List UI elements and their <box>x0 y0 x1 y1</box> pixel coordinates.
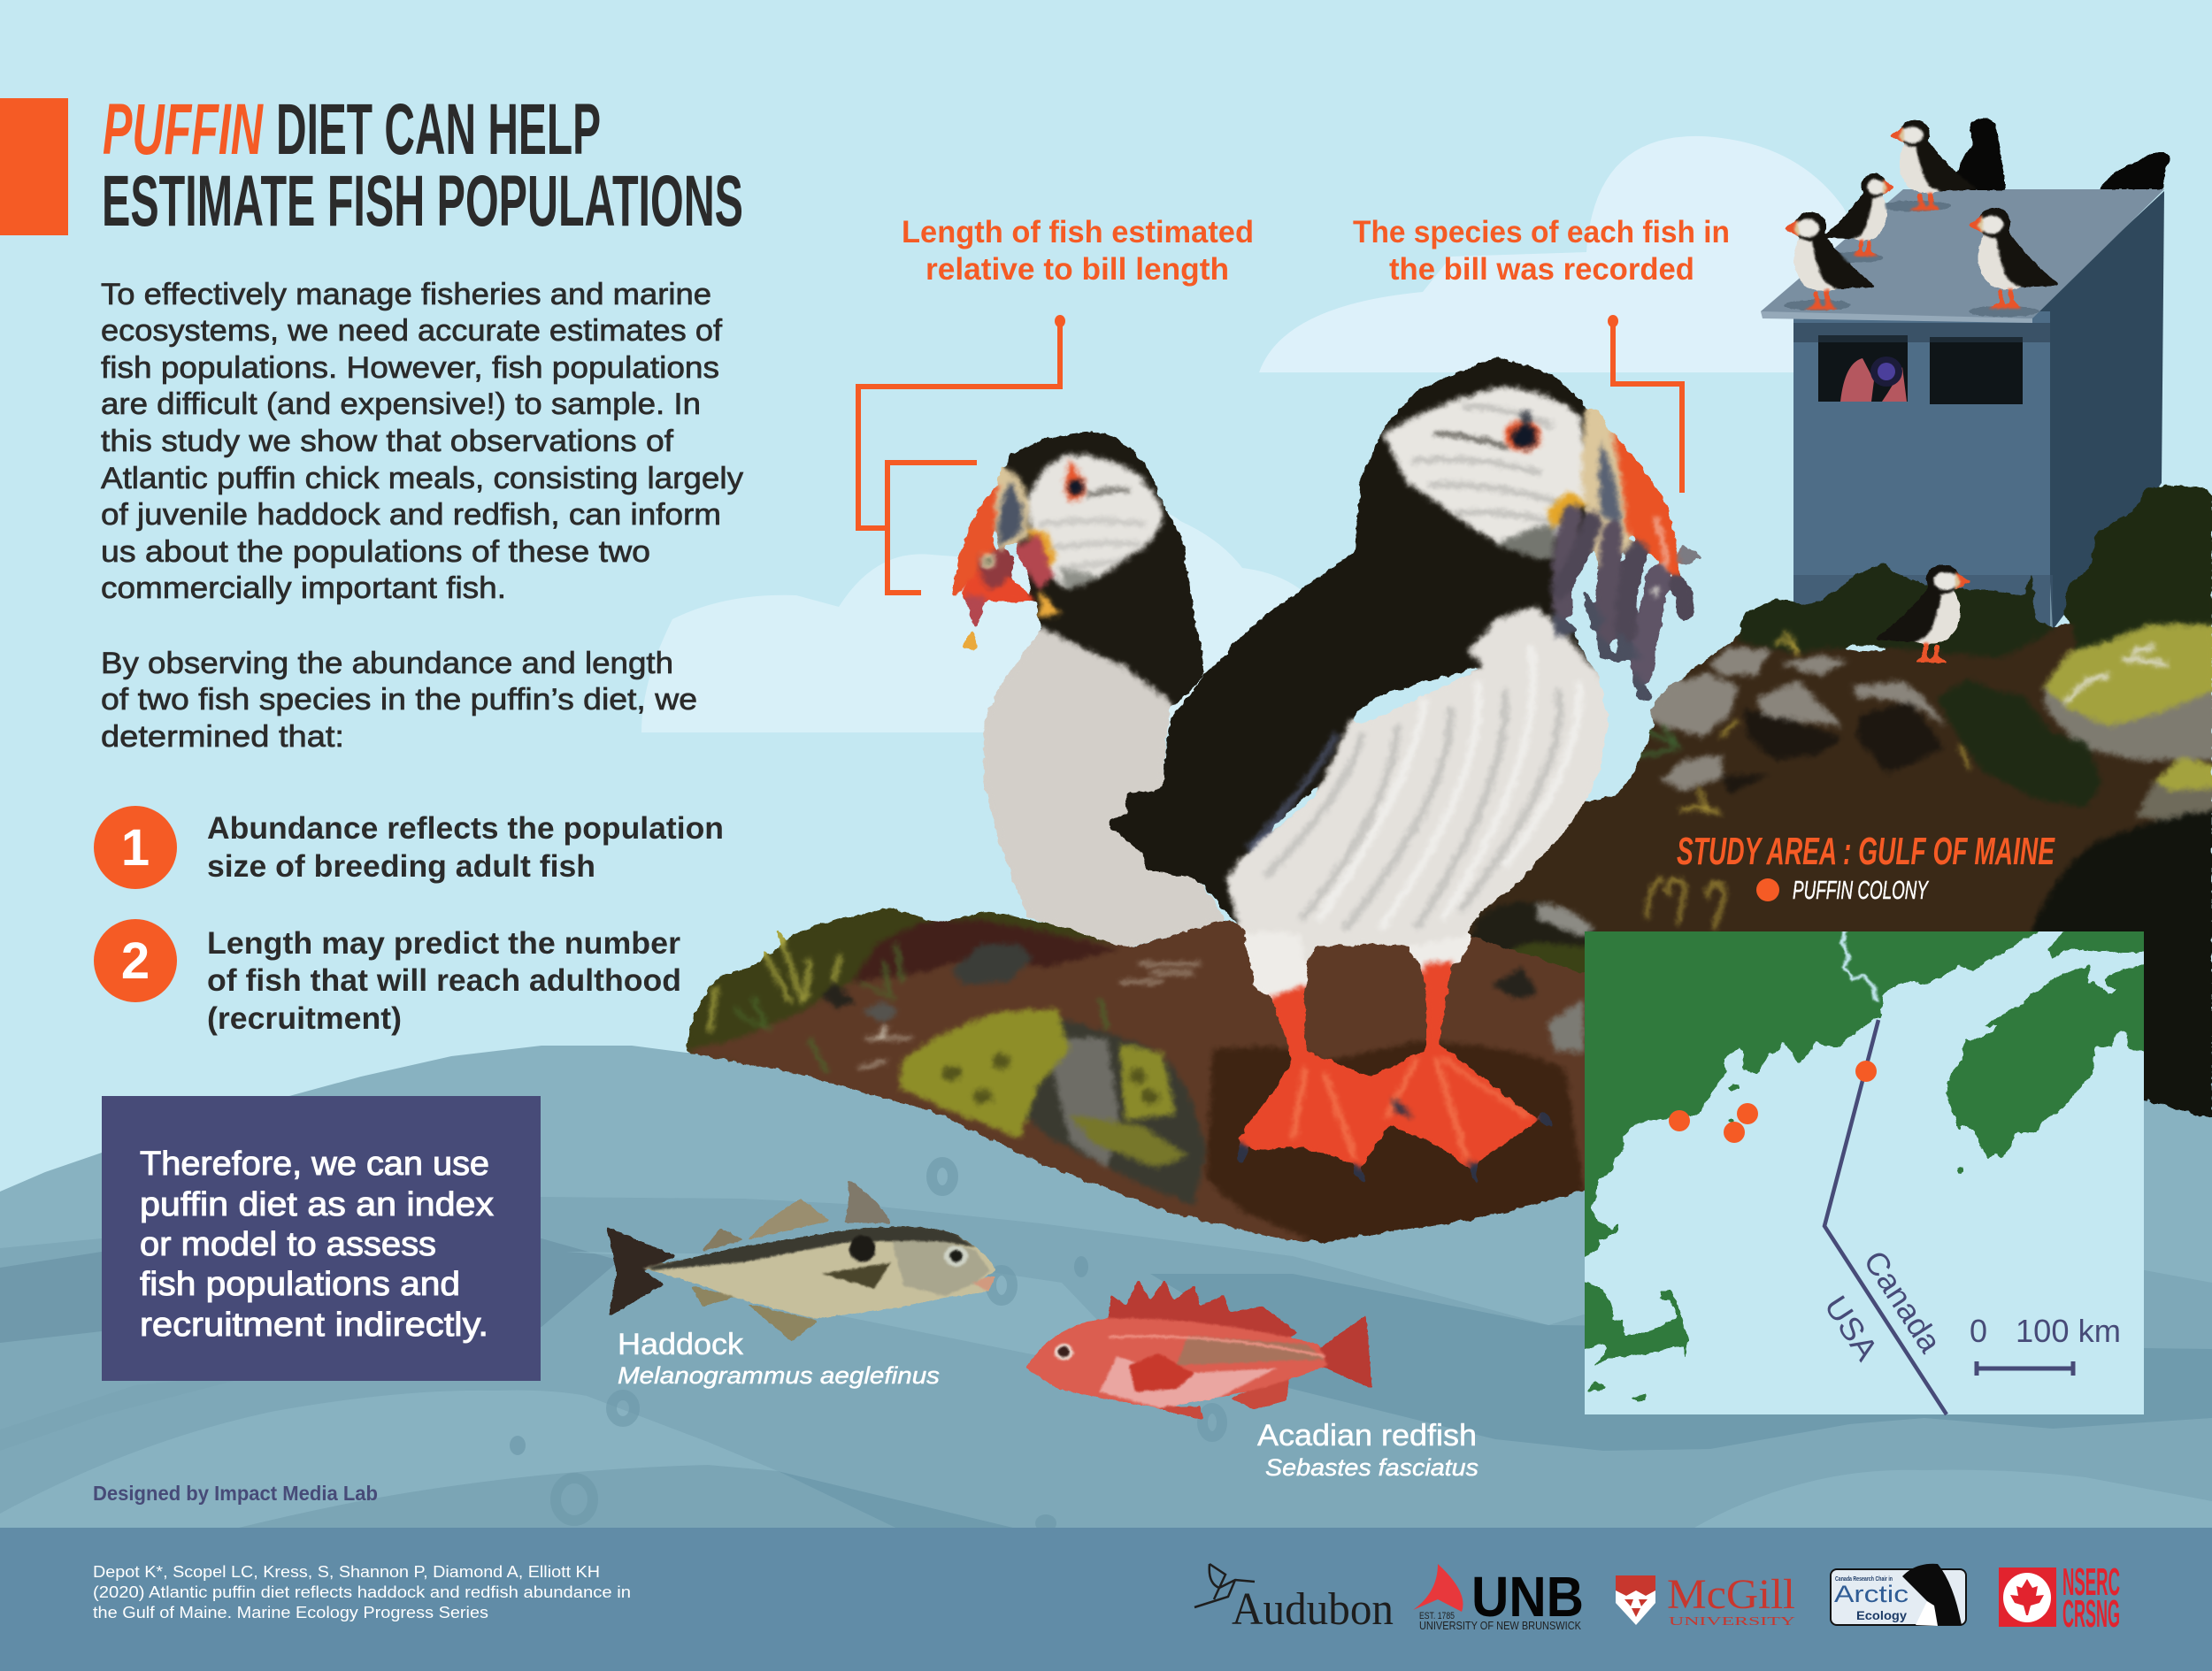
rear puffin black plumage <box>1004 432 1205 705</box>
dark foreground under belly <box>1464 901 1593 1008</box>
citation <box>93 1563 631 1621</box>
silhouette puffin at right <box>2099 152 2170 189</box>
text: NSERC <box>2062 1560 2120 1604</box>
logo: NSERC <box>1999 1560 2120 1636</box>
intro paragraph: Atlantic puffin chick meals, consisting largely <box>101 462 743 495</box>
study area label <box>1677 830 2055 905</box>
fish: Acadian redfish <box>1025 1280 1372 1420</box>
lichen rock <box>2044 625 2212 822</box>
moss mound <box>685 908 1125 1062</box>
dark patch under feet <box>1206 1041 1584 1243</box>
right island: soil, shrubs and rocks <box>1451 483 2212 1194</box>
big puffin <box>1106 356 1705 1194</box>
puffin colony legend dot <box>1756 878 1779 901</box>
border line <box>1824 1020 1947 1414</box>
intro paragraph <box>101 278 743 605</box>
left shrubs <box>1739 565 2055 658</box>
black shrub lower right <box>2032 810 2212 1119</box>
logo: Arctic Ecology: Ecology <box>1856 1608 1907 1622</box>
citation: Depot K*, Scopel LC, Kress, S, Shannon P, Diamond A, Elliott KH <box>93 1563 600 1581</box>
hut roof <box>1761 189 2164 318</box>
text: CRSNG <box>2062 1592 2120 1636</box>
label: Canada: Canada <box>1856 1244 1949 1360</box>
second paragraph: By observing the abundance and length <box>101 647 673 680</box>
puffin colony legend text: PUFFIN COLONY <box>1793 877 1930 905</box>
yellow sprouts <box>710 929 840 1032</box>
title <box>102 89 743 241</box>
footer band <box>0 1528 2212 1671</box>
label: redfish: Sebastes fasciatus <box>1265 1454 1479 1481</box>
logo: Arctic Ecology <box>1831 1564 1966 1626</box>
hut side wall <box>2035 191 2164 630</box>
finding 2: 2 <box>121 932 150 990</box>
logo: McGill: UNIVERSITY <box>1669 1615 1795 1629</box>
hut: observation blind <box>1761 189 2164 630</box>
yellow sprouts <box>1647 632 1970 929</box>
callout text: length: Length of fish estimated <box>902 215 1254 249</box>
citation: (2020) Atlantic puffin diet reflects haddock and redfish abundance in <box>93 1583 631 1601</box>
logo: UNB: UNB <box>1471 1565 1584 1629</box>
island features traced <box>1640 483 2212 929</box>
cloud: upper right <box>1259 136 1885 372</box>
left island <box>685 908 1665 1243</box>
scale label: 0 <box>1970 1313 1987 1349</box>
citation: the Gulf of Maine. Marine Ecology Progress Series <box>93 1604 488 1621</box>
big puffin bill and fish <box>1547 407 1705 701</box>
grey rocks <box>1648 647 1947 793</box>
big puffin belly <box>1226 606 1608 967</box>
puffin D <box>1823 173 1894 257</box>
logo: Arctic Ecology: Arctic <box>1834 1581 1909 1607</box>
fern <box>1640 726 1680 757</box>
right bush <box>2064 483 2212 664</box>
ground puffin <box>1874 564 1971 663</box>
finding 2: (recruitment) <box>207 1001 402 1036</box>
finding 1 <box>94 806 724 889</box>
conclusion box <box>102 1096 541 1381</box>
big puffin black plumage <box>1106 356 1600 926</box>
photographer hands and camera <box>1840 356 1907 402</box>
white leg feathers <box>1243 931 1309 1001</box>
scale label <box>1970 1313 2121 1349</box>
title: ESTIMATE FISH POPULATIONS <box>102 161 743 241</box>
rear puffin belly <box>984 628 1226 948</box>
conclusion box: or model to assess <box>140 1226 436 1263</box>
big puffin face <box>1383 387 1586 558</box>
intro paragraph: To effectively manage fisheries and marine <box>101 278 711 311</box>
callout text: species: The species of each fish in <box>1353 215 1730 249</box>
finding 2 <box>94 919 681 1036</box>
belly feather strokes <box>1265 646 1579 929</box>
callout text: species <box>1353 215 1730 287</box>
grass blades <box>734 944 1107 1073</box>
label: haddock: Melanogrammus aeglefinus <box>618 1362 940 1389</box>
rear puffin <box>951 432 1226 948</box>
hut windows <box>1818 335 2023 404</box>
map water <box>1585 931 2144 1414</box>
small dark rocks <box>821 944 1584 1053</box>
claws <box>1236 1097 1560 1194</box>
finding 1: size of breeding adult fish <box>207 849 595 884</box>
logo: UNB: UNIVERSITY OF NEW BRUNSWICK <box>1419 1619 1581 1632</box>
soil <box>685 920 1665 1241</box>
title: DIET CAN HELP <box>276 89 601 170</box>
pale markings <box>858 964 1200 1068</box>
designer credit: Designed by Impact Media Lab <box>93 1482 378 1505</box>
side accent bar <box>0 98 68 235</box>
second paragraph: of two fish species in the puffin’s diet, we <box>101 683 697 717</box>
map: Gulf of Maine <box>1574 925 2158 1414</box>
label: haddock: Haddock <box>618 1328 744 1361</box>
callout text: length: relative to bill length <box>926 252 1229 287</box>
callout text: length <box>902 215 1254 287</box>
map land <box>1585 931 2144 1401</box>
right foot <box>1368 962 1539 1168</box>
hut front wall <box>1793 311 2050 630</box>
puffin E <box>1784 211 1876 310</box>
label: USA: USA <box>1817 1289 1886 1367</box>
finding 2: Length may predict the number <box>207 926 680 961</box>
big puffin legs and feet <box>1236 931 1560 1194</box>
label: redfish <box>1257 1419 1479 1481</box>
logo: UNB <box>1413 1564 1584 1632</box>
intro paragraph: fish populations. However, fish populations <box>101 351 719 385</box>
finding 2: of fish that will reach adulthood <box>207 963 681 998</box>
logo: McGill <box>1616 1571 1795 1629</box>
puffin A <box>1890 120 1977 211</box>
lichen rock <box>899 1008 1206 1206</box>
intro paragraph: ecosystems, we need accurate estimates of <box>101 314 723 348</box>
left foot <box>1237 985 1399 1168</box>
intro paragraph: are difficult (and expensive!) to sample. In <box>101 387 701 421</box>
rear puffin head details <box>951 454 1164 650</box>
intro paragraph: of juvenile haddock and redfish, can inform <box>101 498 721 532</box>
scale label: 100 km <box>2016 1313 2121 1349</box>
puffin F <box>1968 208 2060 309</box>
second paragraph <box>101 647 697 754</box>
colony dots <box>1669 1061 1877 1143</box>
soil <box>1451 596 2212 1194</box>
logo: Audubon: Audubon <box>1232 1584 1394 1635</box>
fish: haddock <box>607 1179 995 1342</box>
callout text: species: the bill was recorded <box>1389 252 1694 287</box>
label: haddock <box>618 1328 940 1389</box>
cloud: lower left <box>641 510 1327 732</box>
intro paragraph: this study we show that observations of <box>101 425 674 458</box>
conclusion box: fish populations and <box>140 1266 460 1303</box>
roof puffins <box>1784 118 2170 317</box>
callout leader: species <box>1608 315 1682 493</box>
logo: McGill: McGill <box>1667 1571 1795 1618</box>
label: redfish: Acadian redfish <box>1257 1419 1477 1453</box>
ocean waves <box>0 1046 2212 1671</box>
mid bush <box>1938 678 2102 808</box>
second paragraph: determined that: <box>101 720 344 754</box>
logo: UNB: EST. 1785 <box>1419 1611 1455 1621</box>
logo: Arctic Ecology: Canada Research Chair in <box>1835 1576 1893 1583</box>
finding 1: 1 <box>121 819 150 877</box>
conclusion box: Therefore, we can use <box>140 1146 489 1183</box>
conclusion box: recruitment indirectly. <box>140 1307 488 1344</box>
title: PUFFIN <box>103 89 264 170</box>
intro paragraph: us about the populations of these two <box>101 535 650 569</box>
callout leader: bill length brackets <box>858 315 1065 593</box>
conclusion box: puffin diet as an index <box>140 1186 494 1223</box>
finding 1: Abundance reflects the population <box>207 811 724 846</box>
silhouette puffin <box>1957 118 2006 190</box>
logo: Audubon <box>1194 1564 1394 1635</box>
scale bar <box>1977 1361 2073 1376</box>
intro paragraph: commercially important fish. <box>101 571 506 605</box>
